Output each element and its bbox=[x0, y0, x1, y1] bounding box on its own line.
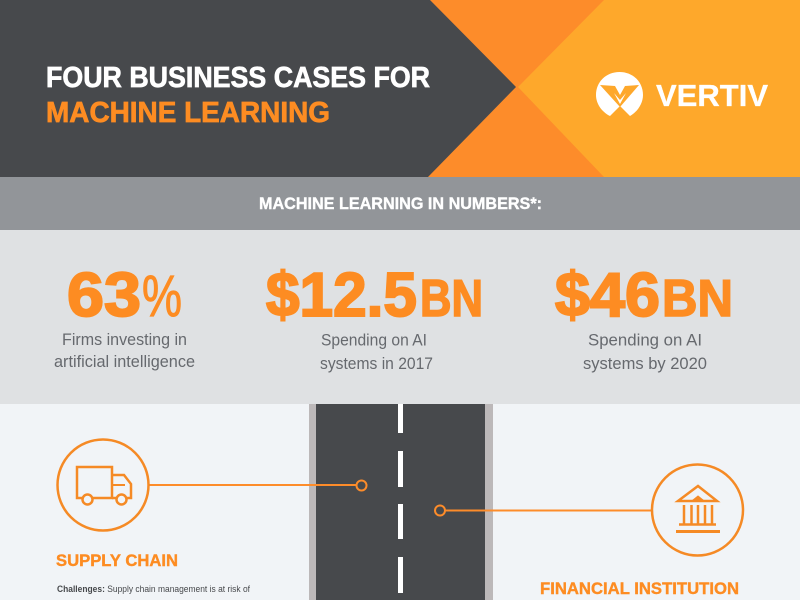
stat: 63%: artificial intelligence bbox=[54, 352, 195, 371]
title bbox=[46, 62, 430, 129]
stat: $46BN: systems by 2020 bbox=[583, 354, 707, 373]
stat: 63%: Firms investing in bbox=[62, 330, 187, 349]
stat: $12.5BN: $12.5 bbox=[266, 261, 417, 330]
stat: $46BN: $46 bbox=[555, 261, 660, 330]
stat: $12.5BN: Spending on AI bbox=[321, 330, 427, 350]
panel: lower background bbox=[0, 404, 800, 600]
logo: Vertiv: VERTIV bbox=[656, 78, 768, 113]
logo: Vertiv bbox=[596, 72, 768, 116]
supply chain heading: SUPPLY CHAIN bbox=[56, 551, 178, 570]
icon: truck bbox=[58, 440, 148, 530]
stat: $12.5BN bbox=[266, 261, 483, 373]
supply chain connector bbox=[149, 480, 366, 490]
stat: $46BN bbox=[555, 261, 733, 373]
stat: $46BN: BN bbox=[662, 270, 733, 328]
title: FOUR BUSINESS CASES FOR bbox=[46, 62, 430, 94]
stat: $12.5BN: systems in 2017 bbox=[320, 354, 433, 373]
stat: $46BN: Spending on AI bbox=[588, 330, 702, 350]
stat: 63%: 63 bbox=[67, 261, 141, 330]
financial institution connector bbox=[435, 506, 652, 516]
title: MACHINE LEARNING bbox=[46, 97, 330, 129]
financial institution heading: FINANCIAL INSTITUTION bbox=[540, 579, 739, 598]
numbers heading band bbox=[0, 177, 800, 230]
stat: 63% bbox=[54, 261, 195, 371]
stat: $12.5BN: BN bbox=[420, 270, 483, 328]
icon: bank bbox=[652, 464, 743, 556]
supply chain text: Challenges: Supply chain management is at risk of bbox=[57, 584, 250, 594]
numbers heading band: MACHINE LEARNING IN NUMBERS*: bbox=[259, 194, 542, 213]
stat: 63%: % bbox=[142, 264, 182, 329]
header panel bbox=[0, 0, 800, 178]
panel: statistics bbox=[0, 230, 800, 404]
road bbox=[309, 404, 493, 600]
